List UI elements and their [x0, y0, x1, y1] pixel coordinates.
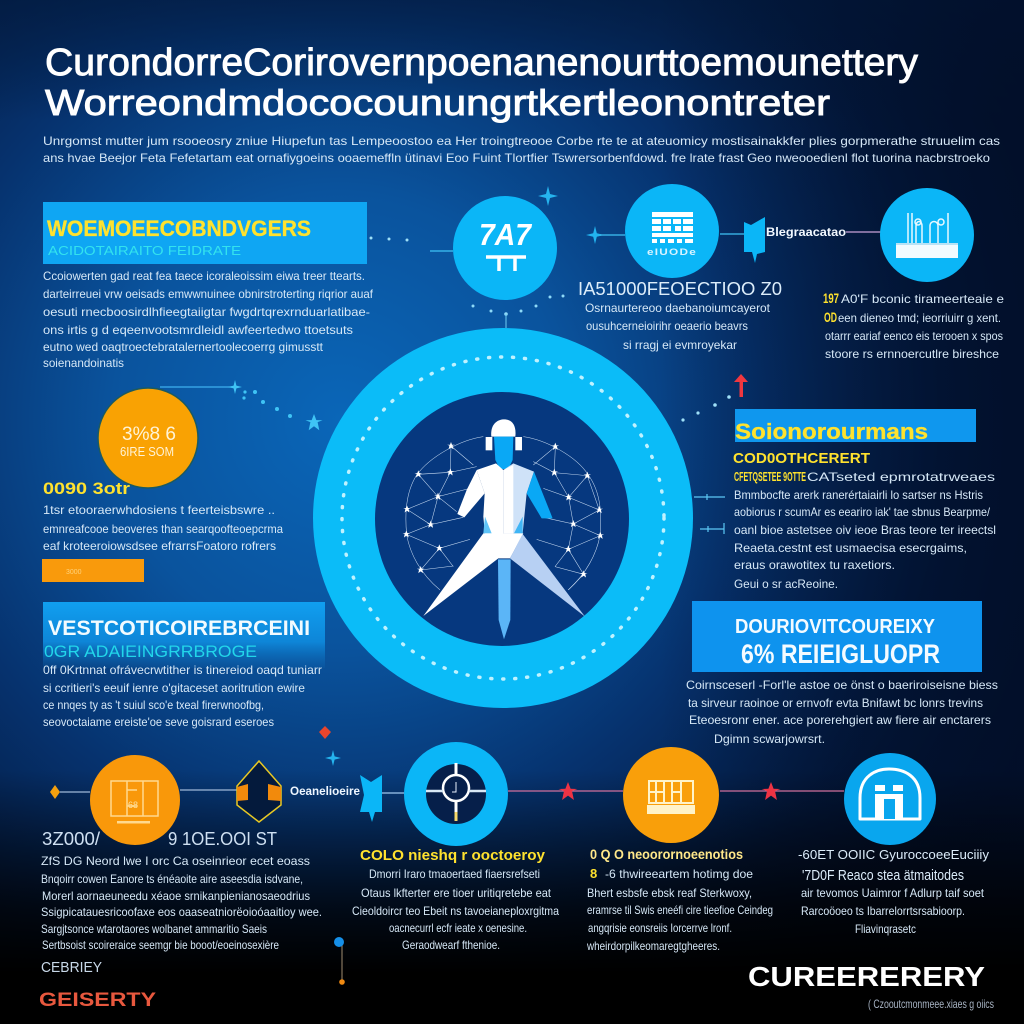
- block: bottom column 4: Rarcoöoeo ts Ibarrelorrtsrsabioorp.: [801, 904, 965, 918]
- text block: right: CFETQSETEE 9OTTE: [734, 470, 806, 484]
- block: bottom column 4: air tevomos Uaimror f Adlurp taif soet: [801, 886, 985, 900]
- timeline connector right: [508, 782, 844, 800]
- circle: 7A7: 7A7: [479, 217, 533, 252]
- title: [45, 42, 918, 123]
- block: bottom column 2: [352, 847, 559, 952]
- text block: stat: eaf kroteeroiowsdsee efrarrsFoatoro rofrers: [43, 539, 276, 553]
- text block: right: Reaeta.cestnt est usmaecisa esecrgaims,: [734, 541, 967, 555]
- block: bottom column 3: angqrisie eonsreiis Iorcerrve lronf.: [588, 921, 732, 935]
- heading: Soionorourmans: [735, 419, 928, 444]
- block: top right: A0'F bconic tirameerteaie e: [841, 292, 1004, 306]
- block: top right: [823, 290, 1004, 361]
- block: bottom column 3: 0 Q O neoorornoeenotios: [590, 846, 743, 862]
- subheading: ACIDOTAIRAITO FEIDRATE: [48, 243, 241, 258]
- circle: calendar grid icon: eIUODe: [647, 247, 697, 258]
- block: bottom column 1: Bnqoirr cowen Eanore ts énéaoite aire aseesdia isdvane,: [41, 872, 303, 886]
- timeline connector left: [50, 785, 237, 799]
- panel: top left heading: [43, 202, 367, 264]
- text block: left lower: ce nnqes ty as 't suiul sco'e txeal firerwnoofbg,: [43, 698, 264, 712]
- orange stat circle: [98, 388, 198, 488]
- label: hexagon: Oeanelioeire: [290, 786, 360, 798]
- block: top right: stoore rs ernnoercutlre bireshce: [825, 347, 999, 361]
- block: bottom column 4: -60ET OOIIC GyuroccoeeEuciiiy: [798, 847, 990, 862]
- icon circle: blue arch: [844, 753, 936, 845]
- block: bottom column 4: Fliavinqrasetc: [855, 922, 916, 936]
- block: top center: si rragj ei evmroyekar: [623, 338, 737, 352]
- circle: 7A7: [453, 196, 557, 300]
- pin connector: [334, 937, 345, 985]
- text block: stat: 1tsr etooraerwhdosiens t feerteisbswre ..: [43, 503, 275, 517]
- star sparkle: [538, 186, 558, 206]
- flag and connector: [360, 775, 404, 822]
- hexagon icon: [237, 761, 281, 822]
- title: Worreondmdococounungrtkertleonontreter: [45, 82, 830, 123]
- block: top center: Osrnaurtereoo daebanoiumcayerot: [585, 301, 771, 315]
- block: bottom column 1: Sertbsoist scoireraice seemgr bie booot/eoeinosexière: [42, 938, 279, 952]
- intro text: [43, 134, 1000, 165]
- orange bar: [42, 559, 144, 582]
- text block: left lower: [43, 663, 322, 729]
- text block: top left: oesuti rnecboosirdlhfieegtaiigtar fwgdrtqrexrnduarlatibae-: [43, 305, 370, 319]
- block: bottom column 1: 3Z000/: [42, 829, 100, 849]
- text block: right highlight: ta sirveur raoinoe or ernvofr evta Bnifawt bc lonrs trevins: [688, 696, 983, 710]
- intro text: ans hvae Beejor Feta Fefetartam eat ornafiygoeins ooaemeffln ütinavi Eoo Fuint Tlortfier Tswrersorbenfdowd. fre lrate frast Geo nweooedienl flot tuorina nacbrstroeko: [43, 151, 990, 165]
- text block: right highlight: [686, 678, 998, 746]
- block: bottom column 3: [586, 846, 773, 953]
- text block: stat: [43, 503, 283, 553]
- connector: orange circle to ring: [160, 380, 323, 430]
- text block: right highlight: Eteoesronr ener. ace porerehgiert aw fiere air enctarers: [689, 713, 991, 727]
- text block: left lower: seovoctaiame ereiste'oe seve goisrard eseroes: [43, 715, 274, 729]
- block: top center: [578, 279, 782, 352]
- logo: footer: CUREERERERY: [748, 961, 985, 992]
- heading: VESTCOTICOIREBRCEINI: [48, 617, 310, 640]
- title: CurondorreCorirovernpoenanenourttoemounettery: [45, 42, 918, 84]
- block: bottom column 1: 9 1OE.OOI ST: [168, 829, 277, 849]
- text block: top left: ons irtis g d eqeenvootsmrdleidl awfeertedwo ttoetsuts: [43, 323, 353, 337]
- text block: right: eraus orawotitex tu raxetiors.: [734, 558, 895, 572]
- text block: right: oanl bioe astetsee oiv ieoe Bras teore ter ireectsl: [734, 523, 996, 537]
- text block: left lower: si ccritieri's eeuif ienre o'gitaceset aoritrution ewire: [43, 681, 305, 695]
- text block: right: Geui o sr acReoine.: [734, 577, 838, 591]
- subheading: COD0OTHCERERT: [733, 450, 870, 467]
- block: bottom column 4: '7D0F Reaco stea ätmaitodes: [802, 867, 964, 884]
- logo: red: GEISERTY: [39, 990, 156, 1011]
- icon circle: orange panels: [90, 755, 180, 845]
- heading: WOEMOEECOBNDVGERS: [47, 216, 311, 241]
- subheading: 0GR ADAIEINGRRBROGE: [44, 642, 257, 661]
- block: bottom column 2: Otaus lkfterter ere tioer uritiqretebe eat: [361, 886, 552, 900]
- block: bottom column 1: [41, 829, 322, 952]
- label: small caption: CEBRIEY: [41, 959, 102, 976]
- orange stat circle: 6IRE SOM: [120, 445, 174, 459]
- stat heading: 0090 3otr: [43, 479, 130, 498]
- block: top right: OD: [824, 309, 837, 325]
- figure in constellation: [403, 419, 604, 639]
- block: bottom column 3: -6 thwireeartem hotimg doe: [605, 867, 753, 881]
- text block: right: aobiorus r scumAr es eeariro iak' tae sbnus Bearpme/: [734, 505, 991, 519]
- circle: tools icon: [880, 188, 974, 282]
- circle: calendar grid icon: [625, 184, 719, 278]
- icon circle: orange building: [623, 747, 719, 843]
- block: bottom column 4: [798, 847, 990, 936]
- panel: right heading: [735, 409, 976, 444]
- text block: right highlight: Coirnsceserl -Forl'le astoe oe önst o baeriroiseisne biess: [686, 678, 998, 692]
- text block: left lower: 0ff 0Krtnnat ofrávecrwtither is tinereiod oaqd tuniarr: [43, 663, 322, 677]
- block: top right: 197: [823, 290, 839, 306]
- central ring with figure: [313, 328, 693, 708]
- text block: stat: emnreafcooe beoveres than searqoofteoepcrma: [43, 522, 283, 536]
- block: bottom column 1: ZfS DG Neord lwe I orc Ca oseinrieor ecet eoass: [41, 854, 310, 868]
- block: bottom column 2: Cieoldoircr teo Ebeit ns tavoeianeploxrgitma: [352, 904, 559, 918]
- text block: top left: [43, 269, 374, 370]
- text block: right: CATseted epmrotatrweaes: [807, 470, 995, 484]
- block: top center: IA51000FEOECTIOO Z0: [578, 279, 782, 299]
- block: bottom column 2: Dmorri Iraro tmaoertaed fiaersrefseti: [369, 867, 540, 881]
- panel: right highlight: 6% REIEIGLUOPR: [741, 639, 940, 669]
- arrow and dots toward right panel: [681, 374, 748, 422]
- panel: left lower heading: [43, 602, 325, 668]
- intro text: Unrgomst mutter jum rsooeosry zniue Hiupefun tas Lempeoostoo ea Her troingtreooe Corbe rte te at ateuomicy mostisainakkfer plies gorpmerathe struuelim cas: [43, 134, 1000, 148]
- block: top center: ousuhcerneioirihr oeaerio beavrs: [586, 319, 748, 333]
- panel: right highlight: [692, 601, 982, 672]
- text block: right: [734, 470, 996, 591]
- orange stat circle: 3%8 6: [122, 424, 176, 445]
- text block: top left: darteirreuei vrw oeisads emwwnuinee obnirstroterting riqrior auaf: [43, 287, 374, 301]
- block: bottom column 2: COLO nieshq r ooctoeroy: [360, 847, 546, 864]
- flag connector: [720, 217, 765, 263]
- top dotted connector: [370, 236, 453, 251]
- side connectors: [694, 494, 725, 534]
- text block: right highlight: Dgimn scwarjowrsrt.: [714, 732, 825, 746]
- block: bottom column 3: wheirdorpilkeomaregtgheeres.: [586, 939, 720, 953]
- text block: top left: Ccoiowerten gad reat fea taece icoraleoissim eiwa treer ttearts.: [43, 269, 365, 283]
- connector with sparkle: [586, 226, 625, 244]
- block: bottom column 1: Ssigpicatauesricoofaxe eos oaaseatniorëoioóaaitioy wee.: [41, 905, 322, 919]
- block: bottom column 3: eramrse til Swis eneéfi cire tieefioe Ceindeg: [587, 903, 773, 917]
- dots under circle: [472, 294, 564, 328]
- orange bar: 3000: [66, 569, 82, 576]
- block: top right: otarrr eariaf eenco eis terooen x spos: [825, 329, 1003, 343]
- block: bottom column 1: Morerl aornaeuneedu xéaoe srnikanpienianosaeodrius: [42, 889, 310, 903]
- block: bottom column 3: Bhert esbsfe ebsk reaf Sterkwoxy,: [587, 886, 752, 900]
- block: bottom column 1: Sargjtsonce wtarotaores wolbanet ammaritio Saeis: [41, 922, 267, 936]
- icon circle: orange panels: 68: [128, 800, 138, 810]
- panel: right highlight: DOURIOVITCOUREIXY: [735, 616, 936, 638]
- block: top right: een dieneo tmd; ieorriuirr g xent.: [838, 311, 1001, 325]
- label: connector: Blegraacatao: [766, 227, 846, 239]
- icon ring: gauge: [404, 742, 508, 846]
- text block: top left: eutno wed oaqtroectebratalernertoolecoerrg gimusstt: [43, 340, 324, 354]
- block: bottom column 2: oacnecurrl ecfr ieate x oenesine.: [389, 921, 527, 935]
- block: bottom column 3: 8: [590, 866, 597, 881]
- red diamond and sparkle: [319, 726, 341, 766]
- text block: right: Bmmbocfte arerk ranerértaiairli lo sartser ns Hstris: [734, 488, 983, 502]
- block: bottom column 2: Geraodwearf fthenioe.: [402, 938, 500, 952]
- text block: top left: soienandoinatis: [43, 356, 124, 370]
